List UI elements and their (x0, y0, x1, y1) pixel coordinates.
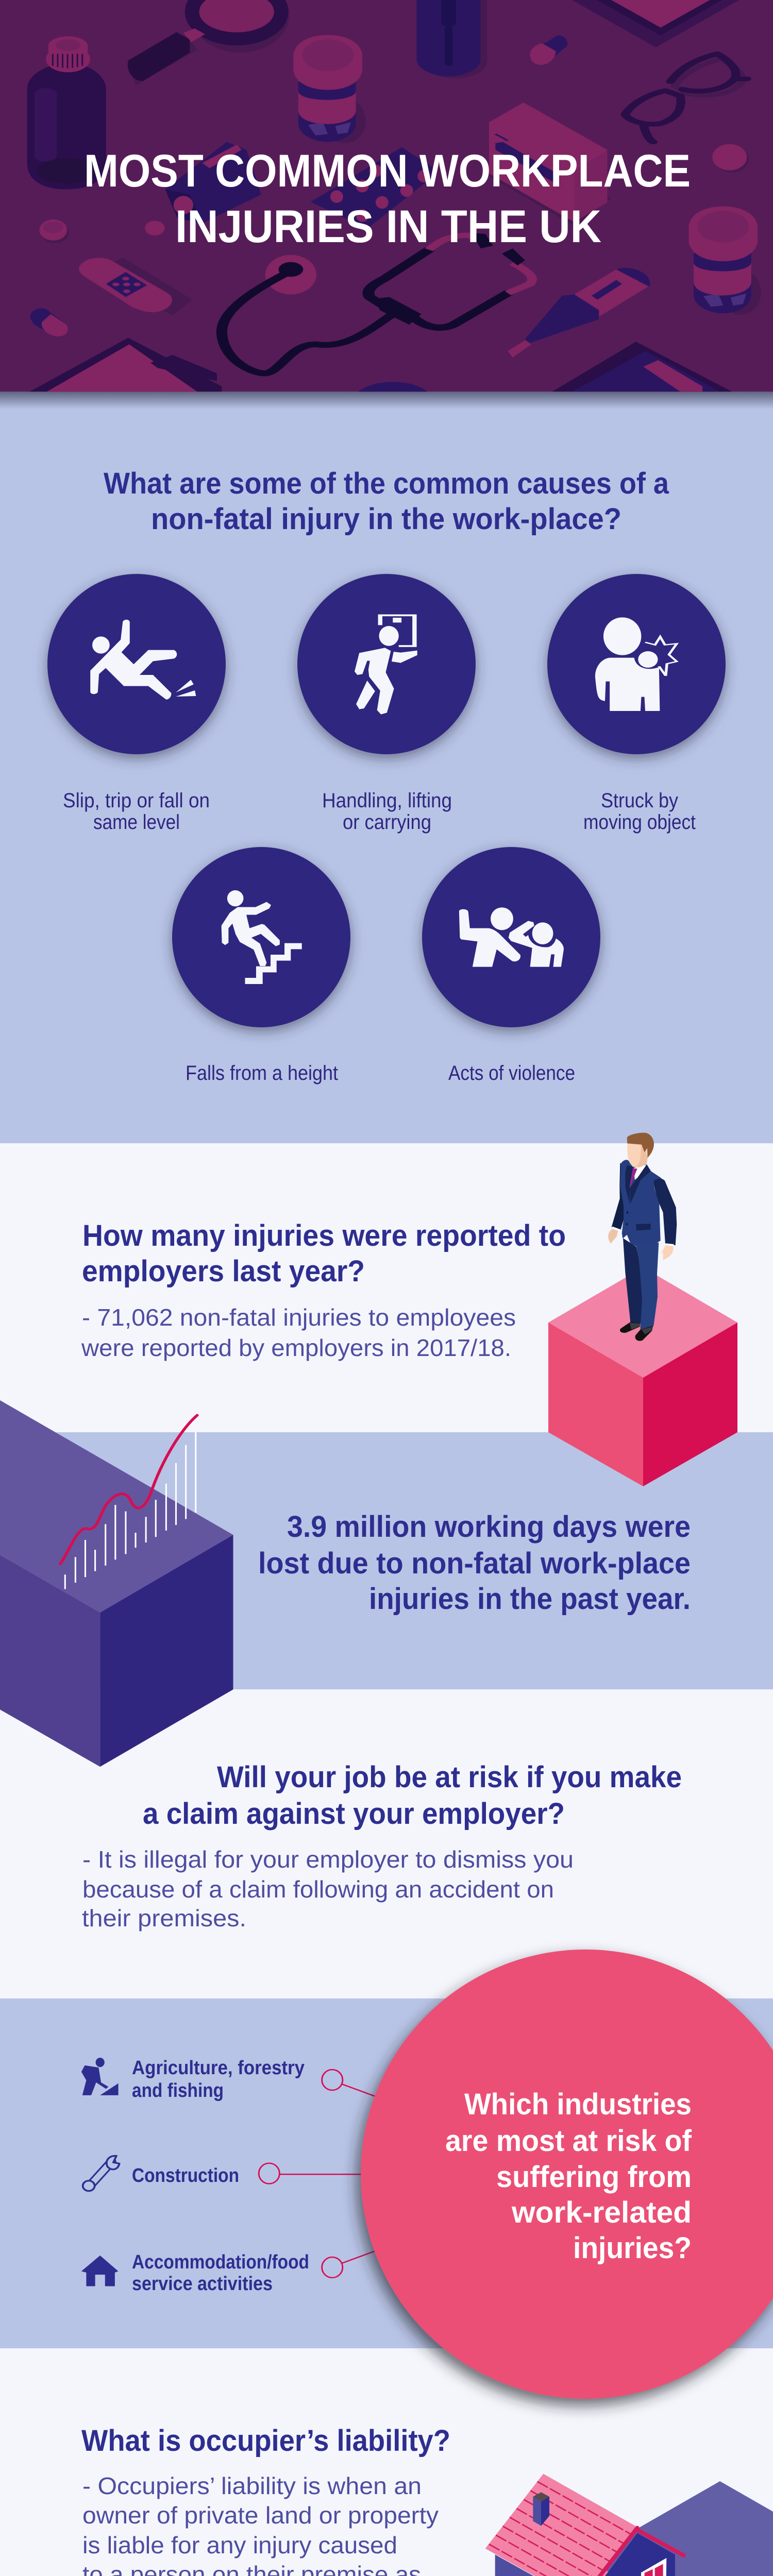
label: agriculture: and fishing (132, 2080, 224, 2102)
pink cube (548, 1267, 737, 1486)
text: job at risk: - It is illegal for your employer to dismiss you (82, 1846, 574, 1873)
icon: agriculture worker (81, 2058, 119, 2095)
text: injuries reported: - 71,062 non-fatal injuries to employees (82, 1304, 516, 1331)
label: falls: Falls from a height (186, 1062, 338, 1084)
panel: occupier's liability (81, 2424, 450, 2576)
label: violence: Acts of violence (448, 1062, 575, 1084)
label: accommodation: service activities (132, 2273, 273, 2295)
heading: industries: Which industries (464, 2088, 692, 2121)
back block (585, 2481, 773, 2576)
heading: injuries reported (82, 1219, 566, 1288)
heading: industries (445, 2088, 692, 2265)
panel: job at risk (82, 1760, 682, 1931)
icon: struck by object (595, 617, 677, 711)
pink circle (361, 1950, 773, 2399)
text: working days lost: lost due to non-fatal work-place (258, 1547, 691, 1580)
panel: injuries reported (81, 1133, 737, 1486)
label: agriculture: Agriculture, forestry (132, 2057, 305, 2079)
heading: causes (104, 467, 669, 536)
title (84, 145, 691, 252)
label: accommodation: Accommodation/food (132, 2251, 309, 2273)
icon: slip (90, 620, 196, 700)
label: accommodation (132, 2251, 309, 2295)
label: slip: same level (93, 811, 180, 834)
text: working days lost (258, 1510, 691, 1616)
medical objects illustration (27, 0, 761, 417)
text: working days lost: 3.9 million working days were (287, 1510, 691, 1544)
label: struck (583, 789, 696, 834)
label: agriculture (132, 2057, 305, 2102)
panel: public places (485, 2474, 773, 2576)
heading: industries: injuries? (573, 2231, 692, 2265)
panel: working days lost (0, 1400, 691, 1767)
label: struck: Struck by (601, 789, 678, 812)
heading: industries: suffering from (496, 2160, 692, 2194)
panel: causes (47, 467, 726, 1084)
heading: job at risk: Will your job be at risk if you make (217, 1760, 682, 1794)
label: slip: Slip, trip or fall on (63, 789, 210, 812)
heading: injuries reported: employers last year? (82, 1255, 365, 1288)
label: construction: Construction (132, 2165, 239, 2187)
icon: house (81, 2256, 119, 2286)
text: job at risk: their premises. (82, 1905, 246, 1931)
label: slip (63, 789, 210, 834)
label: handling: or carrying (343, 811, 431, 834)
text: occupier's liability: owner of private land or property (82, 2502, 439, 2529)
label: handling (322, 789, 452, 834)
title: INJURIES IN THE UK (175, 200, 601, 252)
text: job at risk: because of a claim following an accident on (82, 1876, 554, 1903)
pink block (451, 2558, 720, 2576)
text: injuries reported (81, 1304, 516, 1361)
heading: causes: non-fatal injury in the work-place? (151, 502, 621, 536)
heading: occupier's liability: What is occupier’s liability? (81, 2424, 450, 2458)
heading: injuries reported: How many injuries were reported to (82, 1219, 566, 1252)
text: job at risk (82, 1846, 574, 1931)
icon: wrench (83, 2156, 119, 2191)
circles (47, 574, 726, 1027)
title: MOST COMMON WORKPLACE (84, 145, 691, 196)
label: struck: moving object (583, 811, 696, 834)
heading: industries: are most at risk of (445, 2124, 692, 2158)
heading: job at risk (143, 1760, 682, 1831)
panel: header (0, 0, 773, 417)
purple cube (0, 1400, 233, 1767)
heading: job at risk: a claim against your employer? (143, 1797, 565, 1831)
text: working days lost: injuries in the past year. (369, 1582, 691, 1616)
heading: causes: What are some of the common causes of a (104, 467, 669, 500)
person (608, 1133, 677, 1341)
heading: industries: work-related (511, 2196, 692, 2229)
house (485, 2474, 684, 2576)
text: injuries reported: were reported by employers in 2017/18. (81, 1334, 511, 1361)
icon: fall from height (222, 890, 302, 984)
chart: rising line (60, 1415, 197, 1589)
text: occupier's liability: - Occupiers’ liability is when an (82, 2472, 422, 2499)
icon: handling (355, 615, 417, 715)
icon: violence (459, 907, 564, 967)
panel: industries (81, 1950, 773, 2399)
label: handling: Handling, lifting (322, 789, 452, 812)
text: occupier's liability (82, 2472, 439, 2576)
text: occupier's liability: is liable for any injury caused (82, 2532, 397, 2558)
connector lines (259, 2070, 375, 2278)
